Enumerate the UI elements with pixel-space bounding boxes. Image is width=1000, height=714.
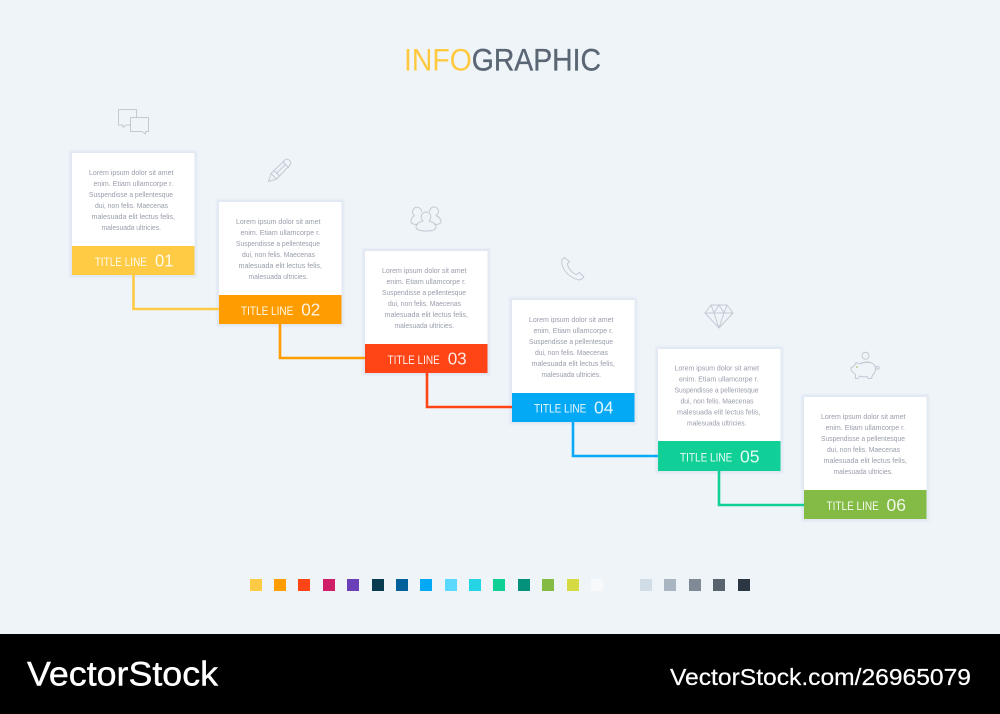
text block 06: dui, non felis. Maecenas bbox=[827, 445, 900, 454]
footer brand: VectorStock bbox=[27, 656, 219, 694]
icon: people bbox=[411, 207, 441, 231]
icon: pencil bbox=[268, 159, 291, 182]
text block 04: malesuada ultricies. bbox=[542, 370, 601, 379]
text block 05: Suspendisse a pellentesque bbox=[674, 386, 758, 394]
label 03: TITLE LINE bbox=[388, 355, 440, 367]
icon: phone bbox=[562, 258, 584, 280]
text block 04 bbox=[529, 315, 615, 379]
text block 03: dui, non felis. Maecenas bbox=[388, 299, 461, 308]
label 01: TITLE LINE bbox=[95, 257, 147, 269]
title: INFOGRAPHIC bbox=[404, 42, 601, 78]
text block 05: dui, non felis. Maecenas bbox=[680, 396, 754, 406]
label 06: 06 bbox=[886, 495, 906, 515]
label 02 bbox=[241, 300, 320, 320]
text block 06 bbox=[821, 412, 907, 476]
label 01: 01 bbox=[155, 251, 174, 271]
connector: 04 to 05 bbox=[573, 422, 658, 456]
text block 01 bbox=[89, 168, 175, 232]
text block 02: enim. Etiam ullamcorpe r. bbox=[240, 228, 320, 237]
text block 05 bbox=[674, 364, 760, 428]
text block 01: Suspendisse a pellentesque bbox=[89, 190, 173, 199]
text block 04: enim. Etiam ullamcorpe r. bbox=[534, 326, 613, 335]
text block 01: enim. Etiam ullamcorpe r. bbox=[94, 179, 173, 188]
text block 02: Suspendisse a pellentesque bbox=[236, 239, 320, 248]
label 02: 02 bbox=[301, 300, 320, 320]
text block 03: malesuada elit lectus felis, bbox=[384, 310, 468, 319]
text block 03: Lorem ipsum dolor sit amet bbox=[382, 266, 466, 275]
text block 03: malesuada ultricies. bbox=[394, 321, 454, 330]
text block 06: malesuada elit lectus felis, bbox=[824, 456, 907, 465]
footer url: VectorStock.com/26965079 bbox=[670, 664, 971, 690]
text block 04: malesuada elit lectus felis, bbox=[532, 359, 615, 368]
label 05 bbox=[680, 446, 760, 466]
text block 03 bbox=[382, 266, 468, 330]
connector: 03 to 04 bbox=[427, 373, 512, 407]
icon: diamond bbox=[705, 305, 733, 328]
panel: card 03 bbox=[362, 248, 490, 376]
text block 05: Lorem ipsum dolor sit amet bbox=[674, 364, 759, 372]
panel: card 05 bbox=[656, 346, 783, 474]
connector: 02 to 03 bbox=[280, 324, 365, 358]
panel: card 01 bbox=[70, 150, 197, 278]
label 06 bbox=[826, 495, 906, 515]
text block 01: Lorem ipsum dolor sit amet bbox=[89, 168, 174, 177]
footer bar bbox=[0, 634, 1000, 714]
icon: piggy bank bbox=[851, 352, 879, 378]
panel: card 06 bbox=[802, 394, 929, 522]
label 06: TITLE LINE bbox=[826, 501, 879, 513]
panel: card 04 bbox=[510, 298, 637, 424]
label 04: TITLE LINE bbox=[534, 404, 587, 416]
panel: card 02 bbox=[216, 200, 344, 326]
text block 04: Suspendisse a pellentesque bbox=[529, 337, 613, 346]
label 04 bbox=[534, 398, 614, 418]
text block 02: dui, non felis. Maecenas bbox=[242, 250, 315, 259]
text block 01: dui, non felis. Maecenas bbox=[95, 201, 168, 210]
text block 03: Suspendisse a pellentesque bbox=[382, 288, 466, 297]
text block 05: enim. Etiam ullamcorpe r. bbox=[679, 374, 758, 384]
icon: chat bubbles bbox=[118, 110, 148, 134]
text block 02: malesuada elit lectus felis, bbox=[238, 261, 322, 270]
text block 03: enim. Etiam ullamcorpe r. bbox=[386, 277, 466, 286]
text block 05: malesuada elit lectus felis, bbox=[677, 408, 760, 416]
text block 06: Lorem ipsum dolor sit amet bbox=[821, 412, 906, 421]
text block 02: Lorem ipsum dolor sit amet bbox=[236, 217, 320, 226]
label 05: TITLE LINE bbox=[680, 452, 733, 464]
text block 01: malesuada ultricies. bbox=[102, 223, 161, 232]
label 05: 05 bbox=[740, 446, 760, 466]
text block 02: malesuada ultricies. bbox=[248, 272, 308, 281]
text block 04: Lorem ipsum dolor sit amet bbox=[529, 315, 614, 324]
label 03 bbox=[388, 349, 467, 369]
connector: 05 to 06 bbox=[719, 471, 804, 505]
label 01 bbox=[95, 251, 174, 271]
text block 06: enim. Etiam ullamcorpe r. bbox=[826, 423, 905, 432]
text block 06: Suspendisse a pellentesque bbox=[821, 434, 905, 443]
label 03: 03 bbox=[448, 349, 467, 369]
text block 05: malesuada ultricies. bbox=[687, 418, 746, 428]
text block 06: malesuada ultricies. bbox=[834, 467, 893, 476]
colour palette swatches bbox=[250, 579, 750, 591]
connector: 01 to 02 bbox=[134, 275, 219, 309]
label 02: TITLE LINE bbox=[241, 306, 294, 318]
text block 01: malesuada elit lectus felis, bbox=[92, 212, 175, 221]
label 04: 04 bbox=[594, 398, 614, 418]
text block 04: dui, non felis. Maecenas bbox=[535, 348, 608, 357]
text block 02 bbox=[236, 217, 322, 281]
